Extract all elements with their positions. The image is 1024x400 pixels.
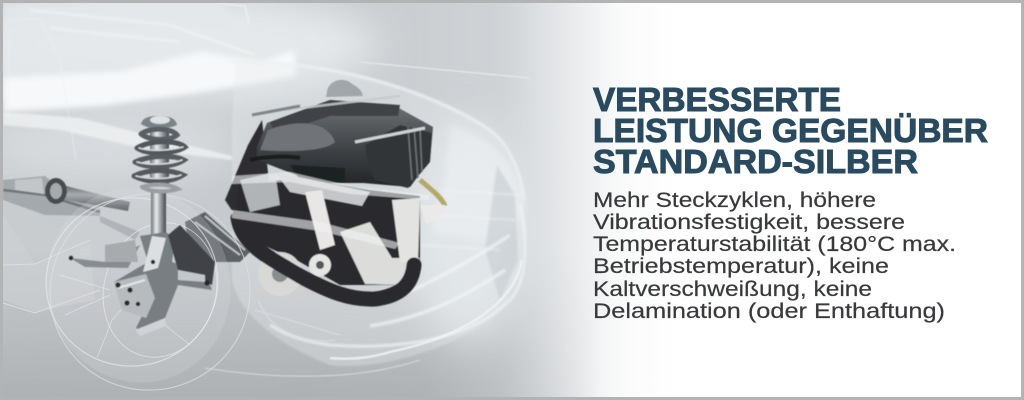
bumper curves bbox=[270, 205, 525, 346]
side window reflections bbox=[3, 112, 232, 160]
coil spring bbox=[134, 129, 185, 191]
illustration: suspension strut with spring bbox=[134, 116, 185, 235]
body text: Delamination (oder Enthaftung) bbox=[593, 300, 945, 323]
background gradient bbox=[3, 3, 612, 397]
front-right wheel arch bbox=[205, 300, 420, 376]
cylinder head bbox=[257, 100, 433, 187]
lower sill panel bbox=[3, 215, 95, 312]
hood outline bbox=[230, 62, 524, 200]
light band across hood edge bbox=[3, 50, 296, 112]
car roof and windscreen bbox=[3, 3, 295, 100]
black coolant pipe bbox=[238, 218, 414, 299]
crankcase bbox=[235, 178, 420, 285]
hood glass bbox=[232, 60, 526, 366]
yellow hose bbox=[420, 180, 445, 206]
damper core bbox=[150, 130, 169, 185]
heading: VERBESSERTE bbox=[593, 81, 841, 118]
engine top mount bbox=[326, 80, 363, 97]
body text: Mehr Steckzyklen, höhere bbox=[593, 189, 876, 212]
strut top mount bbox=[141, 116, 177, 129]
pulleys bbox=[258, 252, 302, 296]
headlight and grille bbox=[430, 125, 524, 240]
illustration: engine bbox=[225, 80, 445, 299]
heading bbox=[593, 81, 988, 180]
strut rod bbox=[151, 190, 166, 235]
body text: Betriebstemperatur), keine bbox=[593, 255, 889, 278]
illustration: transparent car body bbox=[3, 3, 530, 376]
intake box bbox=[365, 125, 432, 188]
heading: LEISTUNG GEGENÜBER bbox=[593, 112, 988, 149]
illustration: drive shaft and axle bbox=[3, 158, 250, 262]
body text: Temperaturstabilität (180°C max. bbox=[593, 233, 956, 256]
engine shadow side bbox=[225, 120, 270, 215]
glass reflections over engine bbox=[232, 172, 430, 249]
body text: Vibrationsfestigkeit, bessere bbox=[593, 211, 905, 234]
body text bbox=[593, 189, 956, 323]
illustration: front wheel bbox=[20, 163, 272, 400]
light alloy block bbox=[275, 172, 370, 206]
body text: Kaltverschweißung, keine bbox=[593, 278, 872, 301]
heading: STANDARD-SILBER bbox=[593, 143, 918, 180]
illustration: wheel hub and knuckle bbox=[69, 225, 215, 336]
